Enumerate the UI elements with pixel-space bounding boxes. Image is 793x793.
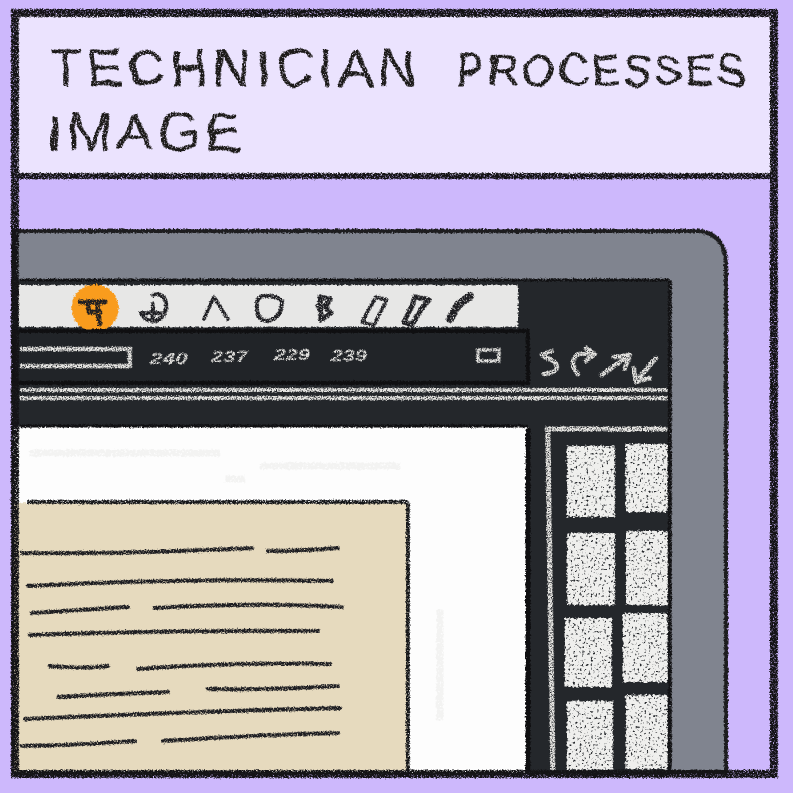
undo, redo and arrow icons [542, 348, 656, 382]
small rectangle icon [478, 350, 499, 361]
color values: 240 [149, 351, 188, 368]
document text lines [22, 548, 342, 746]
document page [14, 502, 408, 772]
monitor [14, 231, 726, 775]
monitor right edge [668, 281, 672, 772]
thumbnail panel [548, 429, 668, 770]
tool bar [18, 284, 518, 332]
color values: 229 [273, 347, 310, 364]
caption title: PROCESSES [456, 46, 746, 95]
thumbnails [565, 444, 668, 770]
input field [20, 349, 130, 366]
caption title [47, 40, 746, 162]
color values: 239 [330, 348, 367, 365]
application window [14, 280, 670, 775]
ruler lines [20, 390, 668, 398]
canvas [14, 426, 528, 772]
caption title: TECHNICIAN [50, 40, 416, 98]
color values: 237 [210, 349, 250, 366]
tool icons [80, 294, 470, 325]
faint canvas smudges [30, 453, 440, 720]
options bar [14, 331, 528, 383]
color values [149, 347, 367, 368]
selected tool: orange highlight [72, 284, 118, 332]
caption box [16, 14, 772, 175]
monitor bezel [14, 231, 726, 772]
caption title: IMAGE [47, 104, 241, 162]
